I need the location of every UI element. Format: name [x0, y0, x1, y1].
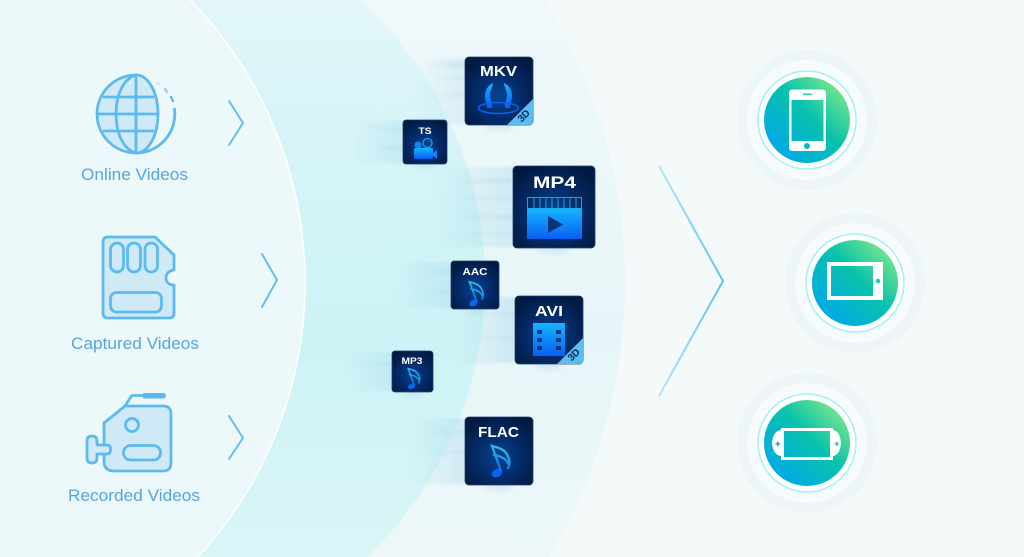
title: TS: TS	[418, 126, 432, 137]
title: MP4: MP4	[533, 173, 577, 192]
icon: tablet	[827, 262, 883, 300]
device: handheld console	[742, 378, 872, 508]
source: captured videos	[71, 237, 199, 353]
label: recorded videos: Recorded Videos	[68, 486, 200, 505]
format tile: AAC	[451, 261, 499, 309]
arrow: big chevron	[659, 166, 723, 396]
format tile: AVI: 3D	[566, 347, 583, 364]
format tile: TS	[403, 120, 447, 164]
outer arc band	[0, 0, 625, 557]
format tile: MKV	[465, 57, 533, 125]
device: tablet	[790, 218, 920, 348]
format tile: MP3	[392, 351, 433, 392]
title: AAC: AAC	[462, 267, 488, 278]
source: recorded videos	[68, 393, 200, 505]
label: online videos: Online Videos	[81, 165, 188, 184]
title: MP3: MP3	[402, 356, 422, 366]
device: phone	[742, 55, 872, 185]
format tile: AVI	[515, 296, 583, 364]
motion streaks	[345, 58, 515, 484]
title: MKV: MKV	[480, 63, 517, 80]
icon: smartphone	[789, 90, 826, 151]
title: FLAC: FLAC	[478, 424, 519, 441]
tile shadows	[403, 124, 570, 490]
source: online videos	[81, 75, 188, 184]
arrow: recorded videos	[229, 416, 243, 459]
label: captured videos: Captured Videos	[71, 334, 199, 353]
arrow: online videos	[229, 101, 243, 145]
arrow: captured videos	[262, 254, 277, 307]
title: AVI: AVI	[535, 303, 563, 320]
icon: memory card	[103, 237, 174, 318]
cyan arc band	[0, 0, 485, 557]
format tile: MP4	[513, 166, 595, 248]
icon: globe	[97, 75, 175, 153]
format tile: FLAC	[465, 417, 533, 485]
inner arc panel	[0, 0, 305, 557]
format tile: MKV: 3D	[516, 108, 533, 125]
icon: camcorder	[87, 393, 171, 471]
icon: console	[772, 428, 841, 460]
